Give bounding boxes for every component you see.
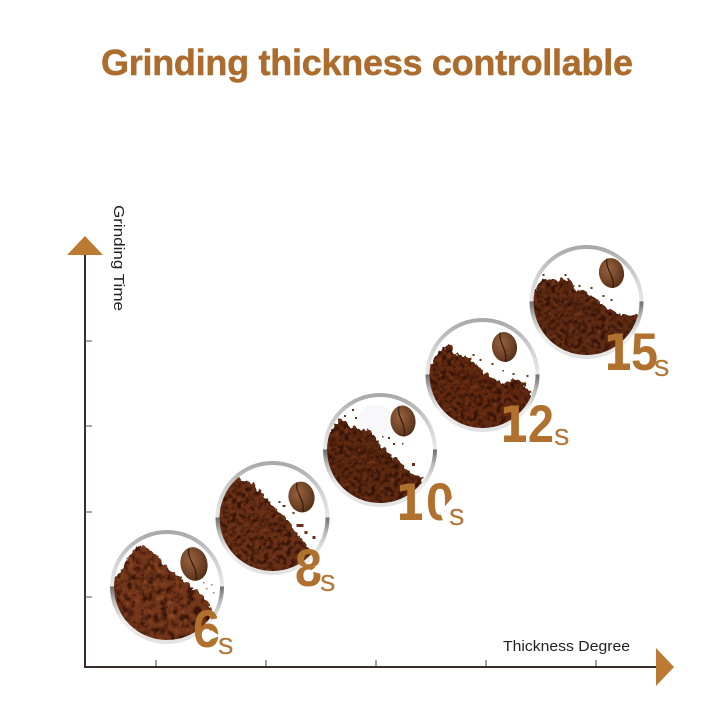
sample: 10 seconds xyxy=(323,393,437,507)
loose specks xyxy=(542,274,612,301)
time label: 15 s: 5 xyxy=(631,323,658,382)
loose specks xyxy=(472,354,528,377)
x axis arrow xyxy=(656,648,674,686)
time label: 12 s xyxy=(499,395,570,454)
time label: 8 s: s xyxy=(320,563,336,598)
coffee bean xyxy=(388,404,418,438)
coffee grounds xyxy=(114,545,212,640)
sample: 15 seconds xyxy=(530,245,644,359)
x axis label: Thickness Degree xyxy=(503,638,630,655)
time label: 12 s: s xyxy=(554,417,570,452)
lens xyxy=(325,395,435,505)
sample: 6 seconds xyxy=(110,530,224,644)
time label: 15 s: 1 xyxy=(603,324,633,382)
y axis arrow xyxy=(67,236,103,255)
loose specks xyxy=(344,409,415,466)
time label: 8 s: 8 xyxy=(295,539,322,598)
time label: 12 s: 1 xyxy=(499,396,529,454)
y axis line xyxy=(84,254,86,668)
x axis line xyxy=(84,666,658,668)
coffee grounds xyxy=(430,344,532,428)
lens xyxy=(532,247,642,357)
y axis ticks xyxy=(85,341,92,597)
coffee bean xyxy=(286,479,317,515)
lens xyxy=(428,320,538,430)
title: Grinding thickness controllable xyxy=(101,42,633,83)
time label: 10 s: s xyxy=(449,497,464,532)
coffee bean xyxy=(597,256,626,290)
coffee grounds xyxy=(534,277,638,355)
coffee bean xyxy=(177,545,211,583)
x axis ticks xyxy=(156,660,596,666)
time label: 15 s: s xyxy=(654,348,670,383)
chart axes xyxy=(67,236,674,686)
time label: 6 s: s xyxy=(218,626,234,661)
time label: 12 s: 2 xyxy=(528,395,554,454)
time label: 10 s: 1 xyxy=(395,474,425,532)
coffee bean xyxy=(490,330,519,364)
time label: 6 s: 6 xyxy=(193,600,220,659)
loose specks xyxy=(203,582,214,594)
time label: 10 s: 0 xyxy=(426,473,454,532)
sample: 12 seconds xyxy=(426,318,540,432)
highlight xyxy=(357,405,393,435)
loose specks xyxy=(278,501,316,539)
time label: 10 s xyxy=(395,473,464,532)
lens xyxy=(112,532,222,642)
lens xyxy=(218,463,328,573)
coffee grounds xyxy=(220,477,311,571)
y axis label: Grinding Time xyxy=(110,205,127,311)
time label: 15 s xyxy=(603,323,670,383)
sample: 8 seconds xyxy=(216,461,330,575)
coffee grounds xyxy=(327,418,424,503)
